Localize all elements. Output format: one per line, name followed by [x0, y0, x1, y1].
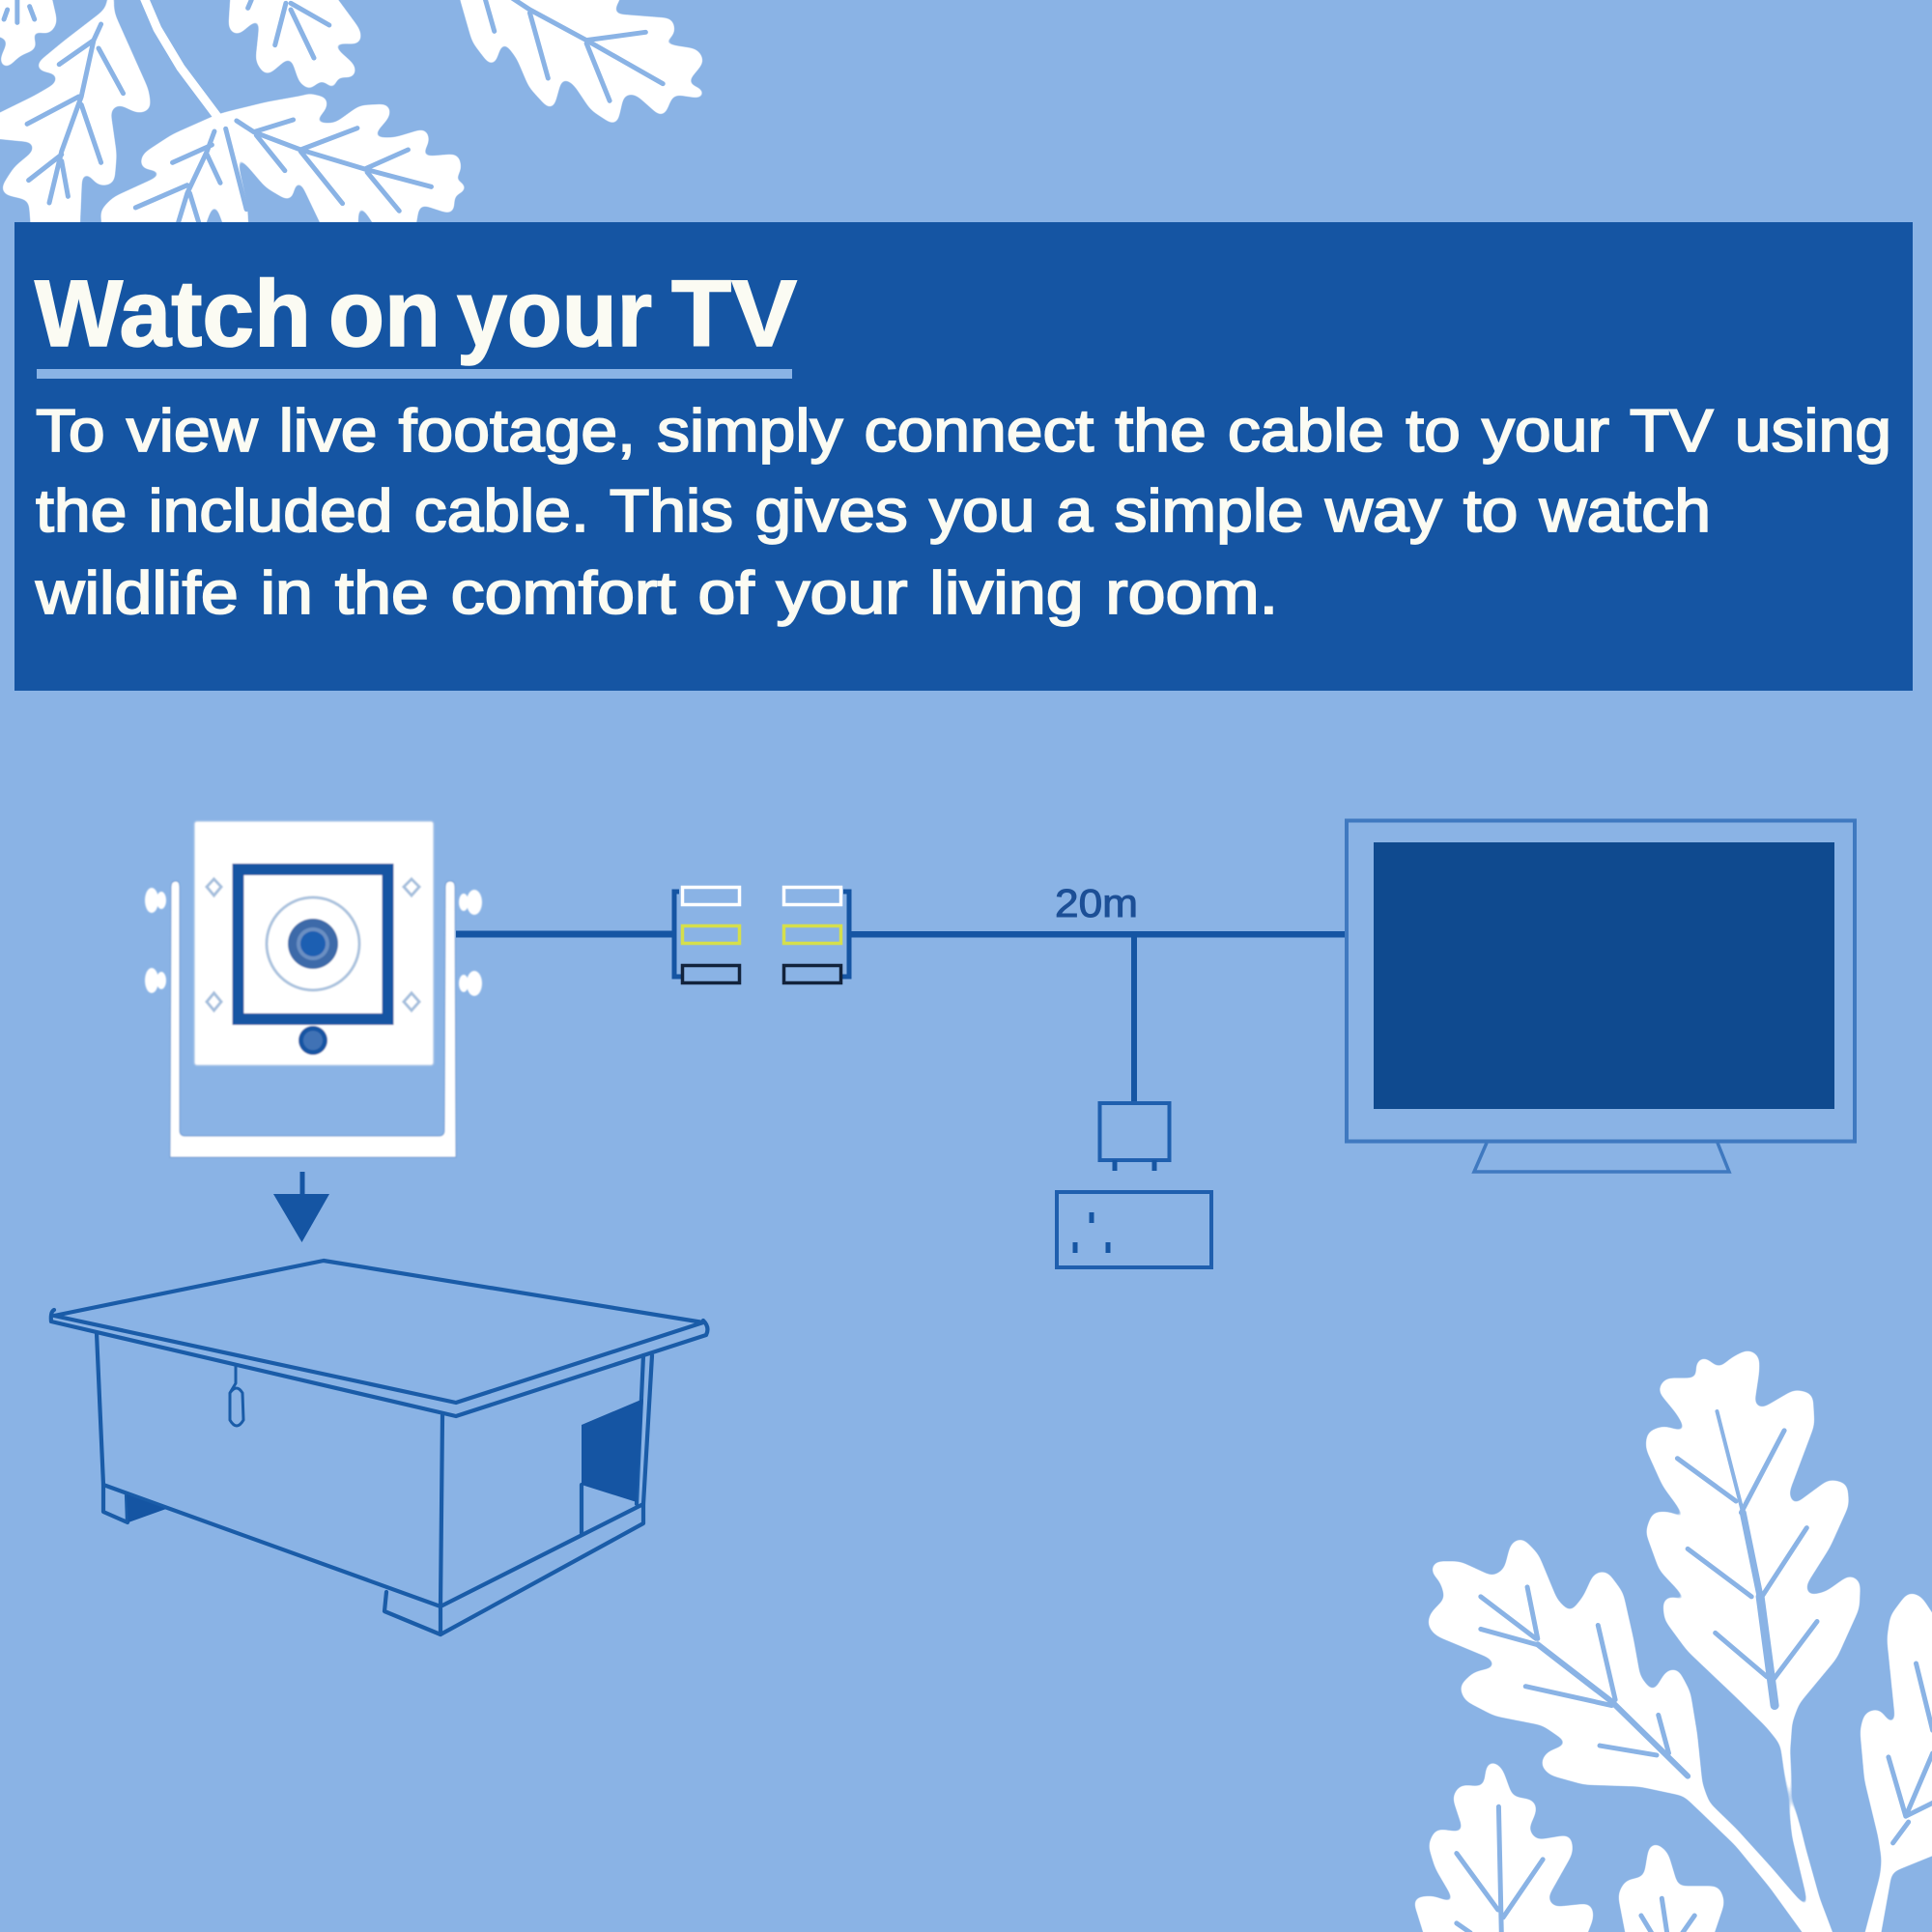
camera unit with bracket	[145, 821, 482, 1157]
knobs	[145, 888, 482, 996]
cable: connectors to TV	[850, 931, 1347, 937]
heading: on	[328, 261, 440, 366]
indicator	[298, 1026, 327, 1055]
television	[1347, 821, 1855, 1172]
tv stand	[1474, 1143, 1729, 1172]
leaf stem	[143, 0, 218, 118]
leaves: top-left cluster	[0, 0, 704, 232]
heading: Watch	[35, 261, 311, 366]
arrow: camera into hutch	[273, 1172, 329, 1242]
connector: right	[784, 887, 849, 983]
lens frame	[238, 869, 388, 1019]
panel: header	[14, 222, 1913, 691]
wildlife hutch	[51, 1261, 707, 1634]
camera faceplate	[194, 821, 434, 1065]
wall socket	[1057, 1192, 1211, 1267]
body text: the included cable. This gives you a simple way to watch	[36, 478, 1711, 545]
heading: TV	[671, 261, 797, 366]
bracket	[170, 881, 456, 1157]
screws	[207, 879, 419, 1010]
heading	[35, 261, 797, 366]
body text: To view live footage, simply connect the cable to your TV using	[36, 398, 1891, 465]
heading: your	[457, 261, 652, 366]
lens	[267, 897, 359, 990]
body text: wildlife in the comfort of your living room.	[35, 560, 1278, 627]
cable: camera to connectors	[456, 931, 674, 937]
power lead	[1131, 934, 1137, 1103]
plug	[1099, 1103, 1169, 1171]
connector: left	[674, 887, 740, 983]
leaves: bottom-right cluster	[1413, 1350, 1932, 1932]
cable length label: 20m	[1055, 881, 1138, 925]
tv screen	[1374, 842, 1834, 1109]
body text	[35, 398, 1891, 627]
heading underline	[37, 369, 792, 379]
